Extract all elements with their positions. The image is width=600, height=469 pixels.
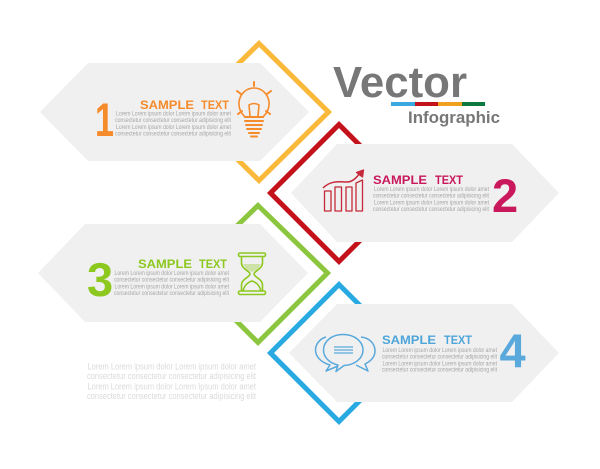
body text 3: Lorem Lorem ipsum dolor Lorem ipsum dolor amet [114, 270, 229, 277]
panel 2: red diamond and arrow [270, 124, 559, 262]
heading 1 [140, 100, 229, 112]
icon: bar chart with arrow [323, 170, 364, 211]
heading 3: SAMPLE [138, 259, 192, 271]
heading 1: SAMPLE [140, 100, 194, 112]
panel 1: yellow diamond and arrow [40, 44, 328, 180]
body text 2: Lorem Lorem ipsum dolor Lorem ipsum dolor amet [374, 186, 489, 193]
body text 4: consectetur consectetur consectetur adipisicing elit [382, 366, 497, 374]
panel 3: green diamond and arrow [38, 206, 328, 342]
heading 3: TEXT [199, 259, 227, 271]
heading 2: TEXT [435, 175, 463, 187]
heading 2: SAMPLE [373, 175, 427, 187]
icon: hourglass [238, 253, 266, 294]
body text 2: consectetur consectetur consectetur adipisicing elit [373, 206, 489, 213]
number 4: 4 [500, 324, 526, 377]
title [333, 58, 500, 127]
icon: light bulb [237, 82, 271, 136]
body text 4 [382, 347, 497, 374]
body text 1: Lorem Lorem ipsum dolor Lorem ipsum dolor amet [116, 124, 231, 131]
body text 3: Lorem Lorem ipsum dolor Lorem ipsum dolor amet [114, 284, 229, 290]
body text 4: Lorem Lorem ipsum dolor Lorem ipsum dolor amet [382, 347, 497, 354]
heading 2 [373, 175, 463, 187]
heading 4: SAMPLE [382, 335, 436, 347]
body text 1 [115, 110, 231, 138]
body text 2: Lorem Lorem ipsum dolor Lorem ipsum dolor amet [374, 200, 489, 206]
body text 3: consectetur consectetur consectetur adipisicing elit [114, 276, 229, 284]
body text 4: Lorem Lorem ipsum dolor Lorem ipsum dolor amet [382, 360, 497, 368]
body text 4: consectetur consectetur consectetur adipisicing elit [382, 354, 497, 360]
body text 1: consectetur consectetur consectetur adipisicing elit [115, 130, 231, 138]
heading 4: TEXT [444, 335, 472, 347]
footer text block: consectetur consectetur consectetur adipisicing elit [87, 371, 256, 381]
body text 1: consectetur consectetur consectetur adipisicing elit [115, 117, 231, 124]
colour bar [391, 102, 485, 106]
body text 1: Lorem Lorem ipsum dolor Lorem ipsum dolor amet [116, 110, 231, 118]
number 1: 1 [95, 93, 114, 146]
title: Vector [333, 58, 467, 107]
body text 2 [373, 186, 489, 213]
heading 3 [138, 259, 227, 271]
number 2: 2 [492, 169, 518, 222]
footer text block: consectetur consectetur consectetur adipisicing elit [87, 391, 256, 401]
footer text block: Lorem Lorem ipsum dolor Lorem ipsum dolor amet [88, 362, 256, 372]
icon: speech bubbles [316, 334, 375, 372]
title: Infographic [408, 108, 500, 127]
footer text block [87, 362, 256, 401]
number 3: 3 [87, 253, 113, 306]
body text 2: consectetur consectetur consectetur adipisicing elit [373, 192, 489, 200]
panel 4: blue diamond and arrow [270, 284, 559, 422]
body text 3: consectetur consectetur consectetur adipisicing elit [114, 290, 229, 297]
heading 1: TEXT [201, 100, 229, 112]
footer text block: Lorem Lorem ipsum dolor Lorem Ipsum dolor amet [88, 382, 256, 392]
heading 4 [382, 335, 472, 347]
body text 3 [114, 270, 229, 297]
